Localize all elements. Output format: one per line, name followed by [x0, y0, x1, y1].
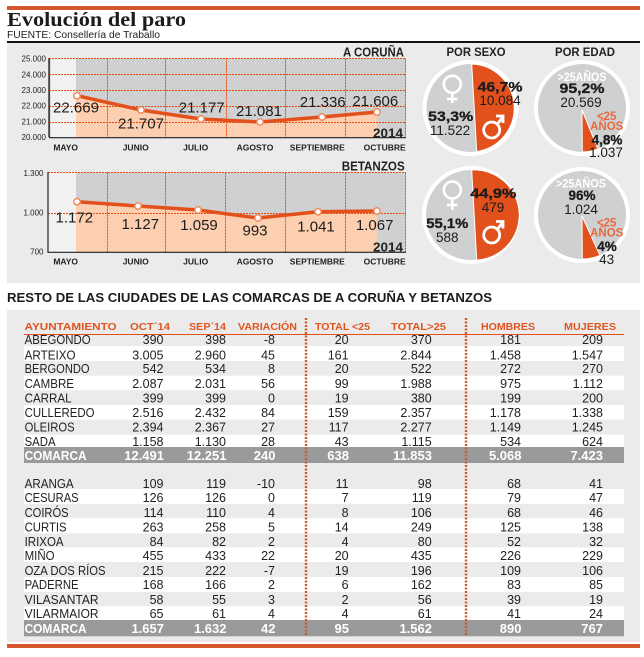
row: Miño: 433 [205, 549, 226, 563]
row: Vilasantar: 2 [342, 593, 349, 607]
line chart: Betanzos: AGOSTO [237, 256, 274, 266]
line chart: Betanzos: 1.127 [122, 216, 159, 233]
line chart: A Coruña: 21.000 [22, 118, 47, 126]
row: Comarca A Coruña total [24, 447, 624, 463]
row: Comarca Betanzos total: 42 [261, 621, 276, 636]
row: Vilarmaior: 24 [589, 607, 603, 621]
row: Coirós: 8 [342, 506, 349, 520]
pie: A Coruña por edad: >25AÑOS [558, 71, 607, 84]
row: Abegondo: 390 [143, 333, 164, 347]
row: Coirós: COIRÓS [25, 505, 69, 520]
row: Coirós: 46 [589, 506, 603, 520]
row: Oleiros: 2.367 [195, 420, 226, 434]
row: Paderne: 2 [268, 578, 275, 592]
row: Bergondo: 272 [500, 362, 521, 376]
table header: OCT´14 [130, 321, 170, 333]
row: Irixoa: 80 [418, 535, 432, 549]
line chart: Betanzos: JUNIO [123, 256, 149, 266]
row: Cambre: 975 [500, 377, 521, 391]
pie: A Coruña por edad: <25 [597, 111, 617, 123]
line chart: A Coruña: A CORUÑA [343, 44, 404, 59]
line chart: Betanzos: JULIO [183, 256, 209, 266]
row: Abegondo: ABEGONDO [25, 333, 91, 347]
row: Comarca A Coruña total: 5.068 [489, 448, 522, 463]
row: Comarca Betanzos total: 1.562 [399, 621, 432, 636]
top orange bar [7, 6, 640, 10]
row: Aranga: 98 [418, 477, 432, 491]
row: Comarca Betanzos total [24, 620, 624, 636]
row: Oza dos Ríos: 19 [335, 564, 349, 578]
row: Vilasantar: 56 [418, 593, 432, 607]
row: Sada: 1.115 [401, 435, 432, 449]
pie: A Coruña por edad: 95,2% [560, 81, 604, 96]
row: Cambre: CAMBRE [25, 377, 74, 391]
row: Curtis: 5 [268, 520, 275, 534]
row: Oleiros: 2.277 [400, 420, 432, 434]
row: Irixoa: 4 [342, 535, 349, 549]
pie: A Coruña por sexo: 11.522 [430, 123, 470, 138]
row: Comarca Betanzos total: 1.632 [194, 621, 226, 636]
heading: por sexo: POR SEXO [446, 47, 506, 59]
row: Cesuras: 119 [412, 491, 432, 505]
row: Comarca A Coruña total: 240 [254, 448, 276, 463]
row: Arteixo: 2.844 [400, 348, 432, 362]
row: Cambre: 56 [261, 377, 275, 391]
row: Miño [25, 549, 603, 563]
row: Oza dos Ríos: -7 [264, 564, 275, 578]
pie: Betanzos por edad: 1.024 [564, 202, 598, 217]
row: Oza dos Ríos: 222 [205, 564, 226, 578]
pie: A Coruña por sexo: 10.084 [479, 93, 521, 108]
pie: A Coruña por sexo: 53,3% [428, 109, 473, 124]
row: Vilasantar: 3 [268, 593, 275, 607]
line chart: Betanzos: 1.059 [180, 217, 218, 234]
row: Bergondo: 8 [268, 362, 275, 376]
line chart: Betanzos: BETANZOS [342, 159, 405, 173]
pie: A Coruña por edad: AÑOS [590, 120, 624, 133]
row: Cesuras: 7 [342, 491, 349, 505]
row: Curtis: 14 [335, 520, 349, 534]
row: Carral: CARRAL [25, 392, 72, 406]
row: Vilarmaior: 4 [342, 607, 349, 621]
row: Oleiros: 2.394 [132, 420, 164, 434]
line chart: A Coruña: 21.177 [179, 100, 225, 117]
row: Irixoa [25, 535, 603, 549]
row: Arteixo: 1.458 [490, 348, 521, 362]
row: Curtis: 258 [205, 520, 226, 534]
line chart: A Coruña: 20.000 [22, 133, 47, 142]
icon: male [484, 116, 503, 138]
table header: TOTAL>25 [391, 321, 446, 333]
row: Culleredo [25, 406, 603, 420]
line chart: Betanzos: 1.000 [23, 208, 44, 218]
row: Culleredo: 1.338 [572, 406, 603, 420]
row: Aranga [25, 477, 603, 491]
row: Vilasantar: 55 [212, 593, 226, 607]
row: Bergondo: 542 [143, 362, 164, 376]
row: Carral: 19 [335, 392, 349, 406]
row: Comarca Betanzos total: COMARCA [25, 621, 87, 636]
line chart: Betanzos: 993 [242, 222, 268, 240]
line chart: Betanzos: 1.300 [23, 169, 44, 178]
row: Paderne: 83 [507, 578, 521, 592]
row: Curtis: 263 [143, 520, 164, 534]
line chart: A Coruña: SEPTIEMBRE [290, 142, 345, 152]
row: Bergondo: BERGONDO [25, 362, 90, 376]
pie: A Coruña por sexo: 46,7% [478, 80, 522, 94]
row: Cesuras: 79 [507, 491, 521, 505]
row: Vilarmaior: 65 [150, 607, 164, 621]
table heading: RESTO DE LAS CIUDADES DE LAS COMARCAS DE A CORUÑA Y BETANZOS [7, 290, 492, 305]
row: Vilasantar [25, 593, 603, 607]
line chart: A Coruña: 2014 [373, 125, 404, 140]
row: Vilasantar: 58 [150, 593, 164, 607]
black rule [7, 41, 640, 43]
row: Oza dos Ríos: OZA DOS RÍOS [25, 563, 106, 578]
table header: SEP´14 [189, 321, 226, 333]
row: Carral: 399 [143, 392, 164, 406]
row: Bergondo: 534 [205, 362, 226, 376]
row: Paderne: PADERNE [25, 578, 79, 592]
row: Carral: 199 [500, 392, 521, 406]
pie: Betanzos por edad: AÑOS [590, 226, 624, 240]
row: Vilarmaior: 61 [212, 607, 226, 621]
line chart: Betanzos: OCTUBRE [364, 256, 406, 266]
row: Miño: MIÑO [25, 549, 55, 563]
row: Irixoa: IRIXOA [25, 535, 64, 549]
panel: charts background [7, 43, 640, 283]
row: Curtis [25, 520, 603, 534]
row: Oza dos Ríos: 196 [411, 564, 432, 578]
pie: A Coruña por edad: 4,8% [592, 132, 622, 148]
row: Miño: 22 [261, 549, 275, 563]
line chart: A Coruña: 23.000 [22, 86, 47, 95]
row: Cesuras: 47 [589, 491, 603, 505]
row: Oleiros: 1.245 [572, 420, 603, 434]
row: Comarca A Coruña total: 638 [327, 448, 349, 463]
row: Carral: 380 [411, 392, 432, 406]
row: Paderne: 168 [143, 578, 164, 592]
row: Vilarmaior: VILARMAIOR [25, 607, 99, 621]
row: Carral: 0 [268, 392, 275, 406]
row: Curtis: 125 [500, 520, 521, 534]
row: Sada: 43 [335, 435, 349, 449]
row: Sada: 1.158 [132, 435, 164, 449]
line chart: A Coruña: 21.336 [300, 94, 346, 111]
row: Miño: 455 [143, 549, 164, 563]
row: Miño: 229 [582, 549, 603, 563]
pie: Betanzos por edad: 4% [597, 239, 617, 254]
row: Arteixo: 161 [328, 348, 349, 362]
row: Comarca Betanzos total: 767 [581, 621, 603, 636]
pie: Betanzos por sexo: 588 [436, 230, 459, 245]
row: Vilasantar: VILASANTAR [25, 593, 99, 607]
row: Comarca Betanzos total: 95 [335, 621, 349, 636]
row: Oza dos Ríos: 109 [500, 564, 521, 578]
title: Evolución del paro [7, 9, 186, 31]
line chart: A Coruña [22, 44, 406, 152]
row: Irixoa: 84 [150, 535, 164, 549]
row: Sada: 534 [500, 435, 521, 449]
table header [25, 320, 616, 333]
line chart: A Coruña: MAYO [53, 142, 78, 152]
row: Cesuras: 0 [268, 491, 275, 505]
line chart: A Coruña: AGOSTO [237, 142, 274, 152]
row: Aranga: 41 [589, 477, 603, 491]
row: Oza dos Ríos: 215 [143, 564, 164, 578]
pie: Betanzos por edad [534, 167, 630, 267]
row: Abegondo: 370 [411, 333, 432, 347]
line chart: A Coruña: JULIO [183, 142, 209, 152]
row: Vilarmaior: 4 [268, 607, 275, 621]
row: Abegondo: 398 [205, 333, 226, 347]
line chart: A Coruña: 25.000 [22, 54, 47, 64]
bottom orange bar [7, 644, 640, 648]
row: Cambre: 1.988 [400, 377, 432, 391]
line chart: Betanzos: 1.041 [297, 218, 335, 236]
row: Sada: SADA [25, 435, 56, 449]
row: Vilarmaior: 41 [507, 607, 521, 621]
row: Coirós: 110 [206, 506, 226, 520]
row: Paderne: 6 [342, 578, 349, 592]
row: Paderne: 166 [205, 578, 226, 592]
row: Paderne [25, 578, 603, 592]
row: Cambre [25, 377, 603, 391]
pie: Betanzos por sexo: 44,9% [470, 186, 516, 201]
row: Coirós [25, 505, 603, 520]
pie: Betanzos por edad: <25 [597, 218, 617, 230]
table header: HOMBRES [481, 321, 535, 333]
row: Coirós: 68 [507, 506, 521, 520]
pie: Betanzos por edad: 96% [568, 188, 596, 203]
icon: female [444, 182, 461, 210]
row: Comarca Betanzos total: 1.657 [131, 621, 164, 636]
pie: A Coruña por edad: 20.569 [560, 95, 602, 110]
row: Abegondo: 181 [500, 333, 521, 347]
row: Irixoa: 32 [589, 535, 603, 549]
row: Sada: 624 [582, 435, 603, 449]
pie: Betanzos por sexo [422, 166, 520, 264]
row: Miño: 226 [500, 549, 521, 563]
row: Aranga: 109 [143, 477, 164, 491]
row: Irixoa: 82 [212, 535, 226, 549]
row: Sada: 28 [261, 435, 275, 449]
row: Cambre: 1.112 [573, 377, 603, 391]
row: Miño: 20 [335, 549, 349, 563]
line chart: Betanzos [23, 159, 406, 266]
line chart: A Coruña: 22.000 [22, 102, 47, 110]
row: Irixoa: 52 [507, 535, 521, 549]
row: Cambre: 2.087 [132, 377, 164, 391]
table rows: A Coruña [24, 333, 624, 463]
line chart: A Coruña: JUNIO [123, 142, 149, 152]
row: Curtis: 138 [582, 520, 603, 534]
row: Sada [25, 435, 603, 449]
row: Paderne: 162 [411, 578, 432, 592]
line chart: Betanzos: 2014 [373, 239, 404, 254]
row: Carral: 399 [205, 392, 226, 406]
row: Oza dos Ríos: 106 [582, 564, 603, 578]
row: Carral: 200 [582, 392, 603, 406]
row: Culleredo: 2.516 [132, 406, 164, 420]
row: Comarca A Coruña total: 11.853 [393, 448, 432, 463]
row: Aranga: ARANGA [25, 477, 74, 491]
table header: TOTAL <25 [315, 321, 370, 333]
row: Arteixo: ARTEIXO [25, 348, 76, 362]
line chart: Betanzos: MAYO [53, 256, 78, 266]
row: Sada: 1.130 [195, 435, 226, 449]
row: Comarca A Coruña total: 12.491 [124, 448, 164, 463]
table stripes [24, 346, 624, 620]
table header: VARIACIÓN [238, 320, 297, 333]
row: Miño: 435 [411, 549, 432, 563]
row: Arteixo [25, 348, 603, 362]
row: Oleiros: OLEIROS [25, 420, 75, 434]
row: Comarca A Coruña total: 7.423 [570, 448, 603, 463]
row: Arteixo: 2.960 [195, 348, 226, 362]
line chart: Betanzos: 1.067 [356, 217, 393, 234]
row: Oleiros [25, 420, 603, 434]
line chart: A Coruña: 21.081 [236, 103, 282, 120]
row: Abegondo: -8 [264, 333, 275, 347]
row: Culleredo: CULLEREDO [25, 406, 95, 420]
row: Comarca A Coruña total: 12.251 [187, 448, 226, 463]
row: Bergondo [25, 362, 603, 376]
row: Oleiros: 27 [261, 420, 275, 434]
row: Oleiros: 1.149 [490, 420, 521, 434]
row: Irixoa: 2 [268, 535, 275, 549]
pie: Betanzos por edad: 43 [599, 252, 614, 267]
row: Arteixo: 1.547 [572, 348, 603, 362]
line chart: Betanzos: 700 [30, 248, 44, 256]
row: Aranga: 119 [206, 477, 226, 491]
row: Carral [25, 392, 603, 406]
row: Aranga: -10 [257, 477, 275, 491]
row: Curtis: CURTIS [25, 520, 67, 534]
row: Abegondo: 20 [335, 333, 349, 347]
row: Bergondo: 20 [335, 362, 349, 376]
row: Coirós: 106 [411, 506, 432, 520]
row: Abegondo: 209 [582, 333, 603, 347]
row: Culleredo: 2.432 [195, 406, 226, 420]
row: Paderne: 85 [589, 578, 603, 592]
row: Abegondo [25, 333, 603, 347]
row: Culleredo: 2.357 [400, 406, 432, 420]
row: Aranga: 68 [507, 477, 521, 491]
row: Arteixo: 3.005 [132, 348, 164, 362]
line chart: A Coruña: 21.707 [118, 116, 164, 133]
row: Vilarmaior [25, 607, 603, 621]
row: Coirós: 114 [144, 506, 164, 520]
line chart: Betanzos: SEPTIEMBRE [290, 256, 345, 266]
row: Comarca A Coruña total: COMARCA [25, 448, 87, 463]
line chart: A Coruña: OCTUBRE [364, 142, 406, 152]
line chart: A Coruña: 24.000 [22, 70, 47, 80]
row: Vilasantar: 19 [589, 593, 603, 607]
row: Cesuras: 126 [143, 491, 164, 505]
row: Culleredo: 84 [261, 406, 275, 420]
line chart: Betanzos: 1.172 [56, 210, 93, 227]
row: Coirós: 4 [268, 506, 275, 520]
row: Aranga: 11 [336, 477, 349, 491]
line chart: A Coruña: 21.606 [352, 93, 398, 110]
row: Vilarmaior: 61 [418, 607, 432, 621]
row: Cesuras: CESURAS [25, 491, 79, 505]
pie: A Coruña por edad [534, 60, 630, 160]
row: Culleredo: 159 [328, 406, 349, 420]
pie: Betanzos por sexo: 479 [482, 200, 504, 215]
row: Oleiros: 117 [329, 420, 349, 434]
line chart: A Coruña: 22.669 [53, 100, 99, 117]
row: Vilasantar: 39 [507, 593, 521, 607]
icon: male [484, 222, 503, 243]
source line: FUENTE: Consellería de Traballo [7, 29, 160, 41]
pie: A Coruña por edad: 1.037 [589, 145, 623, 160]
row: Bergondo: 270 [582, 362, 603, 376]
row: Bergondo: 522 [411, 362, 432, 376]
row: Cesuras: 126 [205, 491, 226, 505]
table rows: Betanzos [24, 477, 624, 636]
row: Curtis: 249 [411, 520, 432, 534]
table header: AYUNTAMIENTO [25, 321, 117, 333]
heading: por edad: POR EDAD [555, 47, 615, 59]
pie: Betanzos por sexo: 55,1% [426, 216, 468, 231]
pie: Betanzos por edad: >25AÑOS [556, 178, 606, 190]
row: Oza dos Ríos [25, 563, 603, 578]
row: Cambre: 2.031 [195, 377, 226, 391]
row: Cambre: 99 [335, 377, 349, 391]
panel: table background [7, 310, 640, 642]
row: Arteixo: 45 [261, 348, 275, 362]
icon: female [444, 76, 461, 103]
row: Comarca Betanzos total: 890 [500, 621, 522, 636]
table header: MUJERES [564, 321, 616, 333]
row: Culleredo: 1.178 [490, 406, 521, 420]
pie: A Coruña por sexo [422, 60, 522, 156]
row: Cesuras [25, 491, 603, 505]
